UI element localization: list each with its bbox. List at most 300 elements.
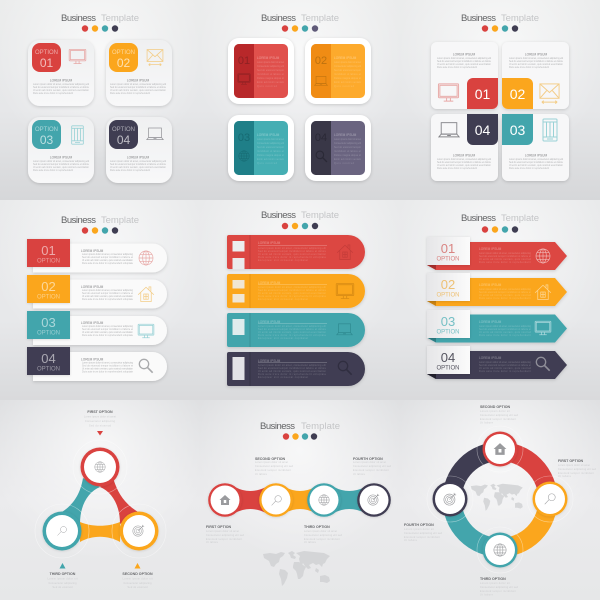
- title: Business: [461, 13, 496, 24]
- connector: teal: [62, 478, 100, 524]
- arrow 01: Ut enim ad minim veniam, quis nostrud: [479, 258, 532, 261]
- quadrant 04: 04: [475, 122, 490, 138]
- tile 03: Incididunt ut labore et: [257, 150, 284, 153]
- connector: teal: [334, 487, 365, 513]
- third option label: THIRD OPTION: [480, 577, 506, 581]
- tile 02: Sed do eiusmod tempor: [334, 69, 361, 72]
- card 04: LOREM IPSUM: [127, 156, 149, 160]
- bar B: [227, 274, 365, 308]
- third option label: THIRD OPTION: [304, 525, 330, 529]
- arrow 02: Ut enim ad minim veniam, quis nostrud: [479, 294, 532, 297]
- bar A: LOREM IPSUM: [258, 241, 281, 245]
- tile 01: Sed do eiusmod tempor: [257, 69, 284, 72]
- node: house: [482, 432, 518, 466]
- arrow 04: Ut enim ad minim veniam, quis nostrud: [479, 367, 532, 370]
- row 02: OPTION: [37, 294, 60, 300]
- node: magnifier: [532, 482, 568, 516]
- fourth option label: Consectetur adipiscing elit sed: [404, 532, 443, 535]
- arrow 01: Lorem ipsum dolor sit amet, consectetur adipiscing: [479, 252, 532, 255]
- second option label: Lorem ipsum dolor sit: [122, 578, 153, 580]
- title: [261, 210, 339, 221]
- second option label: Lorem ipsum dolor sit: [480, 410, 510, 413]
- quadrant 02: Lorem ipsum dolor sit amet, consectetur adipiscing elit: [509, 57, 563, 60]
- row 01: [27, 239, 167, 272]
- arrow 04: Sed do eiusmod tempor incididunt ut labore et: [479, 364, 531, 367]
- world map: [263, 551, 330, 586]
- row 03: 03: [41, 315, 56, 330]
- connector: orange: [285, 487, 315, 513]
- colour dots: [82, 25, 118, 32]
- title: Template: [101, 13, 139, 24]
- panel: circular ring diagram: [404, 405, 597, 596]
- quadrant 04: Lorem ipsum dolor sit amet, consectetur adipiscing elit: [437, 158, 491, 161]
- card 04: 04: [117, 133, 130, 147]
- thin halo rings: [427, 426, 573, 573]
- quadrant 03: Lorem ipsum dolor sit amet, consectetur adipiscing elit: [509, 158, 563, 161]
- bar C: Duis aute irure dolor in reprehenderit voluptate: [258, 334, 327, 337]
- tile 03: [228, 115, 294, 181]
- tile 01: Dolore magna aliqua ut: [257, 77, 284, 80]
- first option label: Ut labore: [206, 541, 219, 544]
- tile 03: Dolore magna aliqua ut: [257, 154, 284, 157]
- tile 01: Incididunt ut labore et: [257, 73, 284, 76]
- tile 02: [305, 38, 371, 104]
- first option label: Consectetur adipiscing elit sed: [206, 534, 245, 537]
- second option label: Consectetur adipiscing: [124, 582, 152, 585]
- fourth option label: Eiusmod tempor incididunt: [353, 469, 389, 472]
- third option label: Lorem ipsum dolor sit amet: [304, 530, 337, 533]
- arrow 01: Duis aute irure dolor in reprehenderit: [479, 261, 531, 264]
- node: target: [432, 482, 468, 516]
- arrow 03: 03: [441, 314, 455, 329]
- quadrant 01: Ut enim ad minim veniam, quis nostrud exercitation: [437, 63, 492, 66]
- quadrant 01: 01: [475, 86, 490, 102]
- quadrant 04: Duis aute irure dolor in reprehenderit: [437, 167, 477, 170]
- row 02: [27, 275, 167, 308]
- tile 03: Sed do eiusmod tempor: [257, 146, 284, 149]
- bar C: Ut enim ad minim veniam, quis nostrud exercitation: [258, 331, 327, 334]
- bar D: LOREM IPSUM: [258, 359, 281, 363]
- quadrant 01: [431, 42, 498, 109]
- tile 01: Consectetur adipiscing elit: [257, 65, 284, 68]
- bar D: Ut enim ad minim veniam, quis nostrud exercitation: [258, 370, 327, 373]
- row 01: Ut enim ad minim veniam, quis nostrud exercitation: [82, 259, 134, 262]
- row 01: Lorem ipsum dolor sit amet, consectetur adipiscing: [82, 253, 134, 256]
- arrow 03: OPTION: [436, 330, 460, 336]
- bar C: Lorem ipsum dolor sit amet, consectetur adipiscing elit: [258, 325, 326, 328]
- row 04: OPTION: [37, 366, 60, 372]
- title: Business: [260, 421, 295, 432]
- arrow 01: [427, 237, 567, 270]
- third option label: Sed do eiusmod: [52, 586, 73, 589]
- quadrant 02: Ut enim ad minim veniam, quis nostrud exercitation: [509, 63, 564, 66]
- tile 01: [228, 38, 294, 104]
- colour dots: [282, 223, 318, 229]
- row 04: Sed do eiusmod tempor incididunt ut labore et: [82, 364, 133, 368]
- title: [260, 421, 340, 432]
- card 03: LOREM IPSUM: [50, 156, 72, 160]
- bar C: LOREM IPSUM: [258, 320, 281, 324]
- card 01: Sed do eiusmod tempor incididunt ut labore et dolore: [33, 86, 90, 89]
- bar B: Duis aute irure dolor in reprehenderit voluptate: [258, 295, 327, 298]
- quadrant 03: 03: [510, 122, 525, 138]
- second option label: SECOND OPTION: [122, 572, 153, 576]
- arrow 03: Ut enim ad minim veniam, quis nostrud: [479, 331, 532, 334]
- bar A: [227, 235, 365, 270]
- tile 04: Consectetur adipiscing elit: [334, 142, 361, 145]
- row 03: Sed do eiusmod tempor incididunt ut labore et: [82, 328, 133, 331]
- first option label: Lorem ipsum dolor sit amet: [206, 530, 239, 533]
- title: Template: [301, 210, 339, 221]
- title: [61, 215, 139, 226]
- ring segment: red: [500, 452, 548, 500]
- quadrant 01: Duis aute irure dolor in reprehenderit: [437, 66, 477, 69]
- first option label: Consectetur adipiscing elit sed: [558, 468, 597, 471]
- card 04: [106, 117, 172, 183]
- second option label: SECOND OPTION: [255, 457, 286, 461]
- title: Business: [61, 215, 96, 226]
- quadrant 02: [502, 42, 569, 109]
- card 03: Lorem ipsum dolor sit amet, consectetur adipiscing elit: [33, 160, 89, 163]
- panel: rounded option cards: [28, 13, 172, 183]
- arrow 01: LOREM IPSUM: [479, 247, 502, 251]
- arrow 02: 02: [441, 277, 455, 292]
- third option label: Consectetur adipiscing elit sed: [304, 534, 343, 537]
- arrow 02: Lorem ipsum dolor sit amet, consectetur adipiscing: [479, 288, 532, 291]
- card 03: Ut enim ad minim veniam, quis nostrud exercitation: [33, 166, 90, 169]
- second option label: Ut labore: [480, 422, 494, 424]
- row 03: Ut enim ad minim veniam, quis nostrud exercitation: [82, 331, 134, 334]
- tile 02: 02: [315, 55, 327, 67]
- colour dots: [283, 433, 317, 440]
- fourth option label: Consectetur adipiscing elit sed: [353, 465, 392, 468]
- title: Template: [301, 421, 340, 432]
- second option label: Lorem ipsum dolor sit amet: [255, 461, 288, 464]
- tile 03: Enim ad minim veniam: [257, 158, 284, 161]
- connector: red: [100, 478, 138, 524]
- ring segment: orange: [500, 500, 548, 548]
- fourth option label: Ut labore: [353, 473, 366, 476]
- tile 04: [305, 115, 371, 181]
- row 03: OPTION: [37, 330, 60, 336]
- panel: arrow rows: [427, 213, 567, 379]
- title: Business: [261, 210, 296, 221]
- marker triangle red: [97, 431, 103, 436]
- connector: red: [235, 487, 266, 513]
- second option label: Eiusmod tempor incididunt: [255, 469, 291, 472]
- tile 04: Enim ad minim veniam: [334, 158, 361, 161]
- quadrant 01: Lorem ipsum dolor sit amet, consectetur adipiscing elit: [437, 57, 491, 60]
- bar A: Sed do eiusmod tempor incididunt ut labore et dolore: [258, 250, 327, 253]
- quadrant 03: Sed do eiusmod tempor incididunt ut labore et dolore: [509, 161, 564, 164]
- third option label: Lorem ipsum dolor sit: [48, 578, 78, 580]
- arrow 01: Sed do eiusmod tempor incididunt ut labore et: [479, 255, 531, 258]
- row 04: 04: [41, 351, 56, 366]
- bar C: Excepteur sint occaecat cupidatat: [258, 337, 308, 340]
- node: target: [120, 512, 158, 550]
- third option label: [48, 572, 78, 589]
- card 02: Sed do eiusmod tempor incididunt ut labore et dolore: [110, 86, 167, 89]
- card 03: Duis aute irure dolor in reprehenderit: [33, 169, 73, 172]
- first option label: FIRST OPTION: [87, 410, 113, 414]
- bar B: LOREM IPSUM: [258, 281, 281, 285]
- colour dots: [482, 226, 518, 233]
- first option label: Sed do eiusmod: [89, 424, 112, 428]
- tile 02: Lorem ipsum dolor sit amet: [334, 61, 361, 64]
- quadrant 03: LOREM IPSUM: [525, 154, 547, 158]
- panel: coloured letter bars: [227, 210, 365, 386]
- card 03: 03: [40, 133, 53, 147]
- tile 04: Incididunt ut labore et: [334, 150, 361, 153]
- marker triangle orange: [134, 563, 140, 568]
- row 03: LOREM IPSUM: [81, 321, 104, 325]
- third option label: Lorem ipsum dolor sit: [480, 582, 510, 585]
- arrow 02: LOREM IPSUM: [479, 283, 502, 287]
- tile 04: 04: [315, 132, 327, 144]
- arrow 04: OPTION: [436, 366, 460, 372]
- tile 01: 01: [238, 55, 250, 67]
- quadrant 02: Duis aute irure dolor in reprehenderit: [509, 66, 549, 69]
- card 01: LOREM IPSUM: [50, 78, 72, 82]
- arrow 03: LOREM IPSUM: [479, 320, 502, 324]
- title: Template: [501, 13, 539, 24]
- third option label: Ut labore: [304, 541, 317, 544]
- third option label: Eiusmod tempor incididunt: [304, 538, 340, 541]
- second option label: Consectetur adipiscing elit sed: [480, 414, 519, 417]
- first option label: Lorem ipsum dolor sit amet: [558, 464, 590, 467]
- panel: three-way triangle diagram: [35, 410, 166, 589]
- tile 04: Quis nostrud: [334, 162, 355, 165]
- row 02: Lorem ipsum dolor sit amet, consectetur adipiscing: [82, 289, 134, 292]
- tile 03: Lorem ipsum dolor sit amet: [257, 138, 284, 141]
- colour dots: [82, 227, 118, 234]
- tile 02: Consectetur adipiscing elit: [334, 65, 361, 68]
- quadrant 02: 02: [510, 86, 525, 102]
- third option label: Ut labore: [480, 594, 494, 596]
- card 03: Sed do eiusmod tempor incididunt ut labore et dolore: [33, 163, 90, 166]
- second option label: [255, 457, 294, 476]
- quadrant 04: LOREM IPSUM: [453, 154, 475, 158]
- quadrant 03: Duis aute irure dolor in reprehenderit: [509, 167, 549, 170]
- fourth option label: Lorem ipsum dolor sit: [404, 528, 434, 531]
- row 04: LOREM IPSUM: [81, 358, 104, 362]
- node: globe: [80, 448, 120, 486]
- quadrant 04: Sed do eiusmod tempor incididunt ut labore et dolore: [437, 161, 492, 164]
- node: magnifier: [259, 483, 293, 517]
- bar D: Sed do eiusmod tempor incididunt ut labore et dolore: [258, 367, 327, 370]
- row 01: LOREM IPSUM: [81, 249, 104, 253]
- arrow 04: 04: [441, 350, 455, 365]
- tile 04: Lorem ipsum dolor sit amet: [334, 138, 361, 141]
- quadrant 01: LOREM IPSUM: [453, 52, 475, 56]
- bar B: Sed do eiusmod tempor incididunt ut labore et dolore: [258, 289, 327, 292]
- title: Business: [61, 13, 96, 24]
- first option label: Ut labore: [558, 475, 572, 478]
- row 02: LOREM IPSUM: [81, 285, 104, 289]
- bar D: [227, 352, 365, 386]
- card 02: Ut enim ad minim veniam, quis nostrud exercitation: [110, 89, 167, 92]
- second option label: [480, 405, 519, 424]
- card 02: Duis aute irure dolor in reprehenderit: [110, 92, 150, 95]
- card 04: Duis aute irure dolor in reprehenderit: [110, 169, 150, 172]
- bar A: Lorem ipsum dolor sit amet, consectetur adipiscing elit: [258, 247, 326, 250]
- row 04: Duis aute irure dolor in reprehenderit voluptate: [82, 370, 134, 374]
- quadrant 04: Ut enim ad minim veniam, quis nostrud exercitation: [437, 164, 492, 167]
- fourth option label: [353, 457, 392, 476]
- ring segment: navy: [452, 452, 500, 500]
- row 04: Ut enim ad minim veniam, quis nostrud exercitation: [82, 368, 134, 370]
- title: Business: [261, 13, 296, 24]
- quadrant 02: LOREM IPSUM: [525, 52, 547, 56]
- fourth option label: [404, 523, 443, 542]
- node: globe: [482, 532, 518, 568]
- tile 01: Enim ad minim veniam: [257, 81, 284, 84]
- first option label: [558, 459, 597, 478]
- tile 02: Enim ad minim veniam: [334, 81, 361, 84]
- thin halo rings: [35, 440, 166, 558]
- row 01: OPTION: [37, 258, 60, 264]
- card 02: LOREM IPSUM: [127, 78, 149, 82]
- node: magnifier: [42, 512, 82, 550]
- title: Template: [301, 13, 339, 24]
- card 02: Lorem ipsum dolor sit amet, consectetur adipiscing elit: [110, 83, 166, 86]
- arrow 03: Duis aute irure dolor in reprehenderit: [479, 334, 531, 337]
- row 02: 02: [41, 279, 56, 294]
- panel: framed colour tiles: [228, 13, 371, 181]
- world map: [471, 484, 523, 511]
- third option label: Consectetur adipiscing: [48, 582, 77, 585]
- title: [461, 13, 539, 24]
- first option label: [206, 525, 245, 544]
- bar C: [227, 313, 365, 347]
- third option label: Eiusmod tempor incididunt: [480, 590, 516, 593]
- arrow 04: [427, 346, 567, 379]
- title: Business: [461, 213, 496, 224]
- row 04: [27, 347, 167, 381]
- fourth option label: FOURTH OPTION: [353, 457, 383, 461]
- card 01: Ut enim ad minim veniam, quis nostrud exercitation: [33, 89, 90, 92]
- tile 04: Sed do eiusmod tempor: [334, 146, 361, 149]
- tile 03: Consectetur adipiscing elit: [257, 142, 284, 145]
- third option label: [304, 525, 343, 544]
- row 03: Duis aute irure dolor in reprehenderit voluptate: [82, 334, 134, 337]
- connector: orange: [80, 522, 120, 542]
- second option label: Ut labore: [255, 473, 268, 476]
- node: globe: [307, 483, 341, 517]
- row 04: Lorem ipsum dolor sit amet, consectetur adipiscing: [82, 362, 134, 364]
- arrow 03: Lorem ipsum dolor sit amet, consectetur adipiscing: [479, 325, 532, 328]
- first option label: Eiusmod tempor incididunt: [206, 538, 242, 541]
- row 01: 01: [41, 243, 56, 258]
- first option label: Consectetur adipiscing: [85, 420, 116, 423]
- node: house: [208, 483, 242, 517]
- bar B: Lorem ipsum dolor sit amet, consectetur adipiscing elit: [258, 286, 326, 289]
- row 02: Sed do eiusmod tempor incididunt ut labore et: [82, 292, 133, 295]
- tile 02: Quis nostrud: [334, 85, 355, 88]
- fourth option label: Lorem ipsum dolor sit amet: [353, 461, 386, 464]
- card 01: 01: [40, 56, 53, 70]
- card 02: OPTION: [112, 50, 135, 56]
- arrow 02: [427, 273, 567, 306]
- tile 02: Incididunt ut labore et: [334, 73, 361, 76]
- tile 01: Lorem ipsum dolor sit amet: [257, 61, 284, 64]
- row 02: Duis aute irure dolor in reprehenderit voluptate: [82, 298, 134, 301]
- row 03: [27, 311, 167, 345]
- tile 02: LOREM IPSUM: [334, 56, 357, 60]
- first option label: [84, 410, 116, 428]
- tile 04: Dolore magna aliqua ut: [334, 154, 361, 157]
- card 04: Sed do eiusmod tempor incididunt ut labore et dolore: [110, 163, 167, 166]
- fourth option label: Eiusmod tempor incididunt: [404, 536, 440, 539]
- row 02: Ut enim ad minim veniam, quis nostrud exercitation: [82, 295, 134, 298]
- second option label: Consectetur adipiscing elit sed: [255, 465, 294, 468]
- bar B: Ut enim ad minim veniam, quis nostrud exercitation: [258, 292, 327, 295]
- colour dots: [482, 25, 518, 32]
- card 04: Ut enim ad minim veniam, quis nostrud exercitation: [110, 166, 167, 169]
- title: Template: [501, 213, 539, 224]
- third option label: Consectetur adipiscing elit sed: [480, 586, 519, 589]
- first option label: FIRST OPTION: [558, 459, 584, 463]
- arrow 02: OPTION: [436, 292, 460, 298]
- card 01: [28, 40, 94, 106]
- bar D: Duis aute irure dolor in reprehenderit voluptate: [258, 373, 327, 376]
- tile 03: Quis nostrud: [257, 162, 278, 165]
- bar D: Lorem ipsum dolor sit amet, consectetur adipiscing elit: [258, 364, 326, 367]
- fourth option label: FOURTH OPTION: [404, 523, 434, 527]
- arrow 03: Sed do eiusmod tempor incididunt ut labore et: [479, 328, 531, 331]
- arrow 02: Duis aute irure dolor in reprehenderit: [479, 297, 531, 300]
- arrow 01: OPTION: [436, 256, 460, 262]
- third option label: THIRD OPTION: [50, 572, 76, 576]
- card 03: OPTION: [35, 127, 58, 133]
- second option label: SECOND OPTION: [480, 405, 511, 409]
- title: [461, 213, 539, 224]
- arrow 04: LOREM IPSUM: [479, 356, 502, 360]
- title: Template: [101, 215, 139, 226]
- colour dots: [282, 25, 318, 32]
- arrow 01: 01: [441, 241, 455, 256]
- fourth option label: Ut labore: [404, 539, 418, 542]
- card 01: OPTION: [35, 50, 58, 56]
- first option label: FIRST OPTION: [206, 525, 232, 529]
- quadrant 02: Sed do eiusmod tempor incididunt ut labore et dolore: [509, 60, 564, 63]
- marker triangle teal: [60, 563, 66, 568]
- title: [61, 13, 139, 24]
- card 03: [28, 117, 94, 183]
- row 03: Lorem ipsum dolor sit amet, consectetur adipiscing: [82, 325, 134, 328]
- second option label: Sed do eiusmod: [128, 586, 148, 589]
- arrow 03: [427, 310, 567, 342]
- tile 04: LOREM IPSUM: [334, 133, 357, 137]
- card 01: Lorem ipsum dolor sit amet, consectetur adipiscing elit: [33, 83, 89, 86]
- row 01: Sed do eiusmod tempor incididunt ut labore et: [82, 256, 133, 259]
- first option label: Eiusmod tempor incididunt: [558, 472, 594, 475]
- bar A: Duis aute irure dolor in reprehenderit voluptate: [258, 256, 327, 259]
- quadrant 04: [431, 114, 498, 181]
- card 04: OPTION: [112, 127, 135, 133]
- quadrant 03: [502, 114, 569, 181]
- ring segment: teal: [452, 500, 500, 548]
- arrow 04: Duis aute irure dolor in reprehenderit: [479, 370, 531, 373]
- arrow 02: Sed do eiusmod tempor incididunt ut labore et: [479, 291, 531, 294]
- tile 01: Quis nostrud: [257, 85, 278, 88]
- title: [261, 13, 339, 24]
- tile 03: 03: [238, 132, 250, 144]
- row 01: Duis aute irure dolor in reprehenderit voluptate: [82, 262, 134, 265]
- first option label: Lorem ipsum dolor sit amet: [84, 416, 116, 418]
- bar A: Excepteur sint occaecat cupidatat: [258, 259, 308, 262]
- panel: timeline chain: [206, 421, 392, 586]
